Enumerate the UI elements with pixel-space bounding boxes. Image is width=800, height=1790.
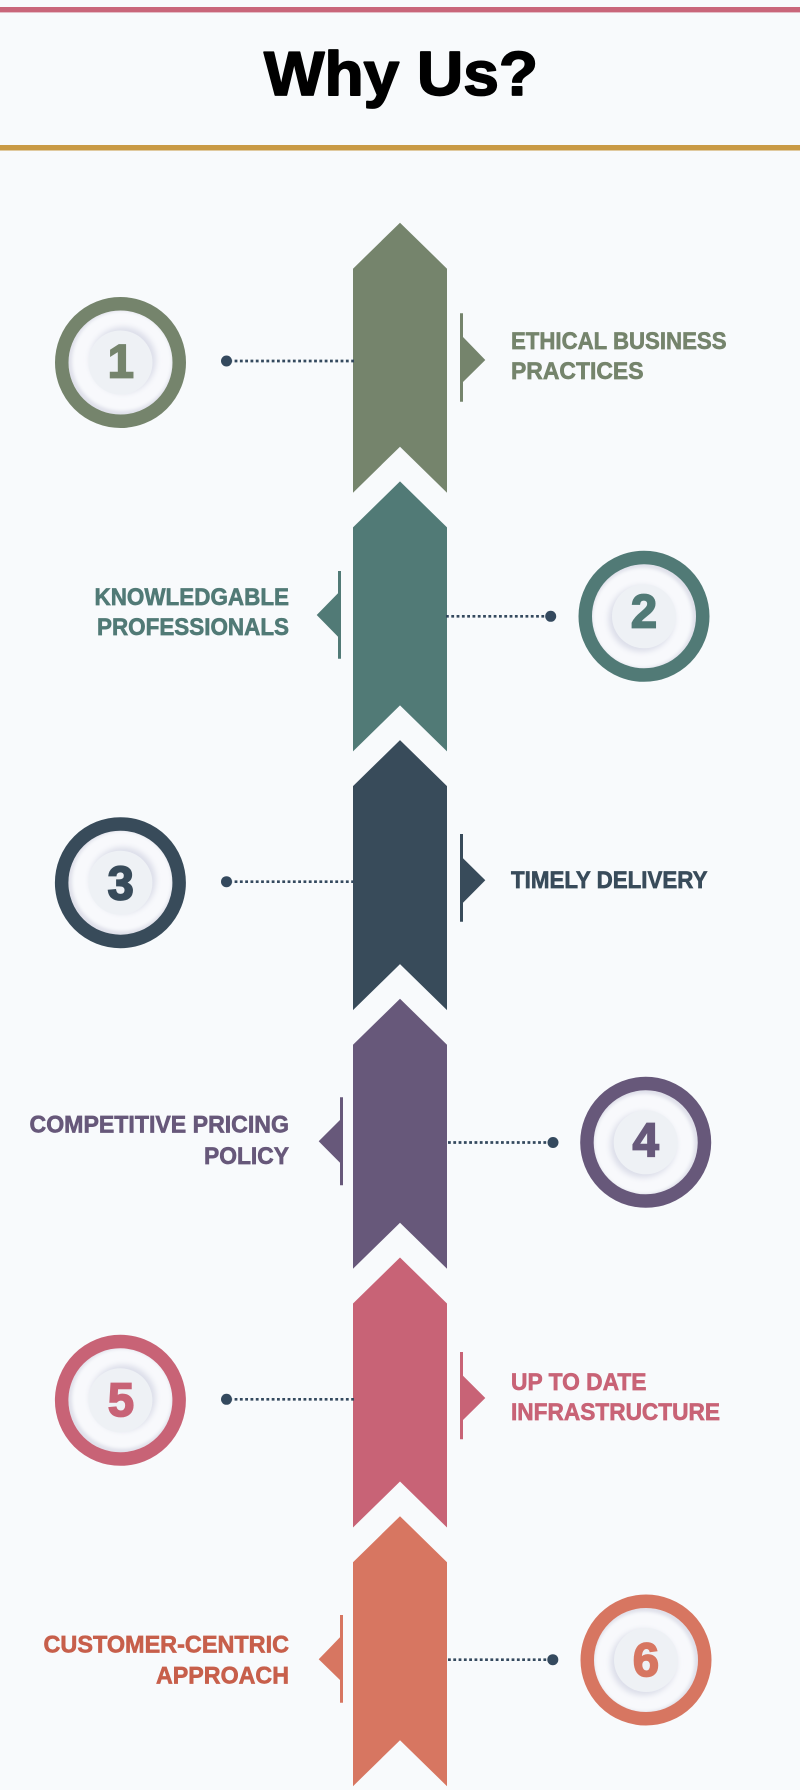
label 4: POLICY [204,1144,289,1170]
label 4: COMPETITIVE PRICING [30,1113,289,1139]
arrow 1 [353,223,447,493]
connector 3 [221,876,354,887]
badge 1 [62,304,179,421]
badge 5: 5 [108,1373,134,1426]
arrow 6 [353,1516,447,1786]
arrow 2 [353,481,447,751]
connector 6 [448,1654,558,1665]
label 1 [511,329,726,385]
label 2: PROFESSIONALS [97,615,289,641]
arrow 3 [353,740,447,1010]
step 6 [44,1516,705,1786]
label 5: UP TO DATE [511,1370,646,1396]
badge 3: 3 [108,856,134,910]
header bottom bar [0,145,800,150]
label 6: CUSTOMER-CENTRIC [44,1633,289,1659]
step 2 [94,481,703,751]
label 5 [511,1370,720,1426]
badge 6 [587,1601,705,1719]
connector 5 [221,1394,354,1405]
label 6: APPROACH [156,1663,289,1689]
label 2 [94,585,289,641]
label 3: TIMELY DELIVERY [511,868,708,894]
pointer 1 [460,313,485,402]
badge 2: 2 [631,584,657,638]
arrow 5 [353,1258,447,1528]
step 3 [62,740,708,1010]
pointer 6 [319,1615,343,1703]
badge 4: 4 [633,1113,659,1166]
badge 2 [585,558,703,675]
pointer 5 [460,1352,485,1439]
label 1: ETHICAL BUSINESS [511,329,726,355]
pointer 3 [460,834,485,922]
step 1 [62,223,726,493]
badge 1: 1 [108,334,134,388]
label 1: PRACTICES [511,359,644,385]
title: Why Us? [264,39,538,109]
label 6 [44,1633,289,1689]
connector 4 [448,1137,558,1148]
header top bar [0,7,800,12]
label 5: INFRASTRUCTURE [511,1400,720,1426]
step 4 [30,999,704,1269]
connector 2 [446,611,556,622]
badge 5 [62,1342,179,1459]
connector 1 [221,356,354,366]
badge 4 [587,1084,704,1201]
badge 3 [62,824,179,941]
label 4 [30,1113,289,1170]
arrow 4 [353,999,447,1269]
step 5 [62,1258,720,1528]
pointer 2 [317,571,341,659]
badge 6: 6 [633,1633,659,1686]
label 2: KNOWLEDGABLE [94,585,289,611]
pointer 4 [319,1097,343,1185]
